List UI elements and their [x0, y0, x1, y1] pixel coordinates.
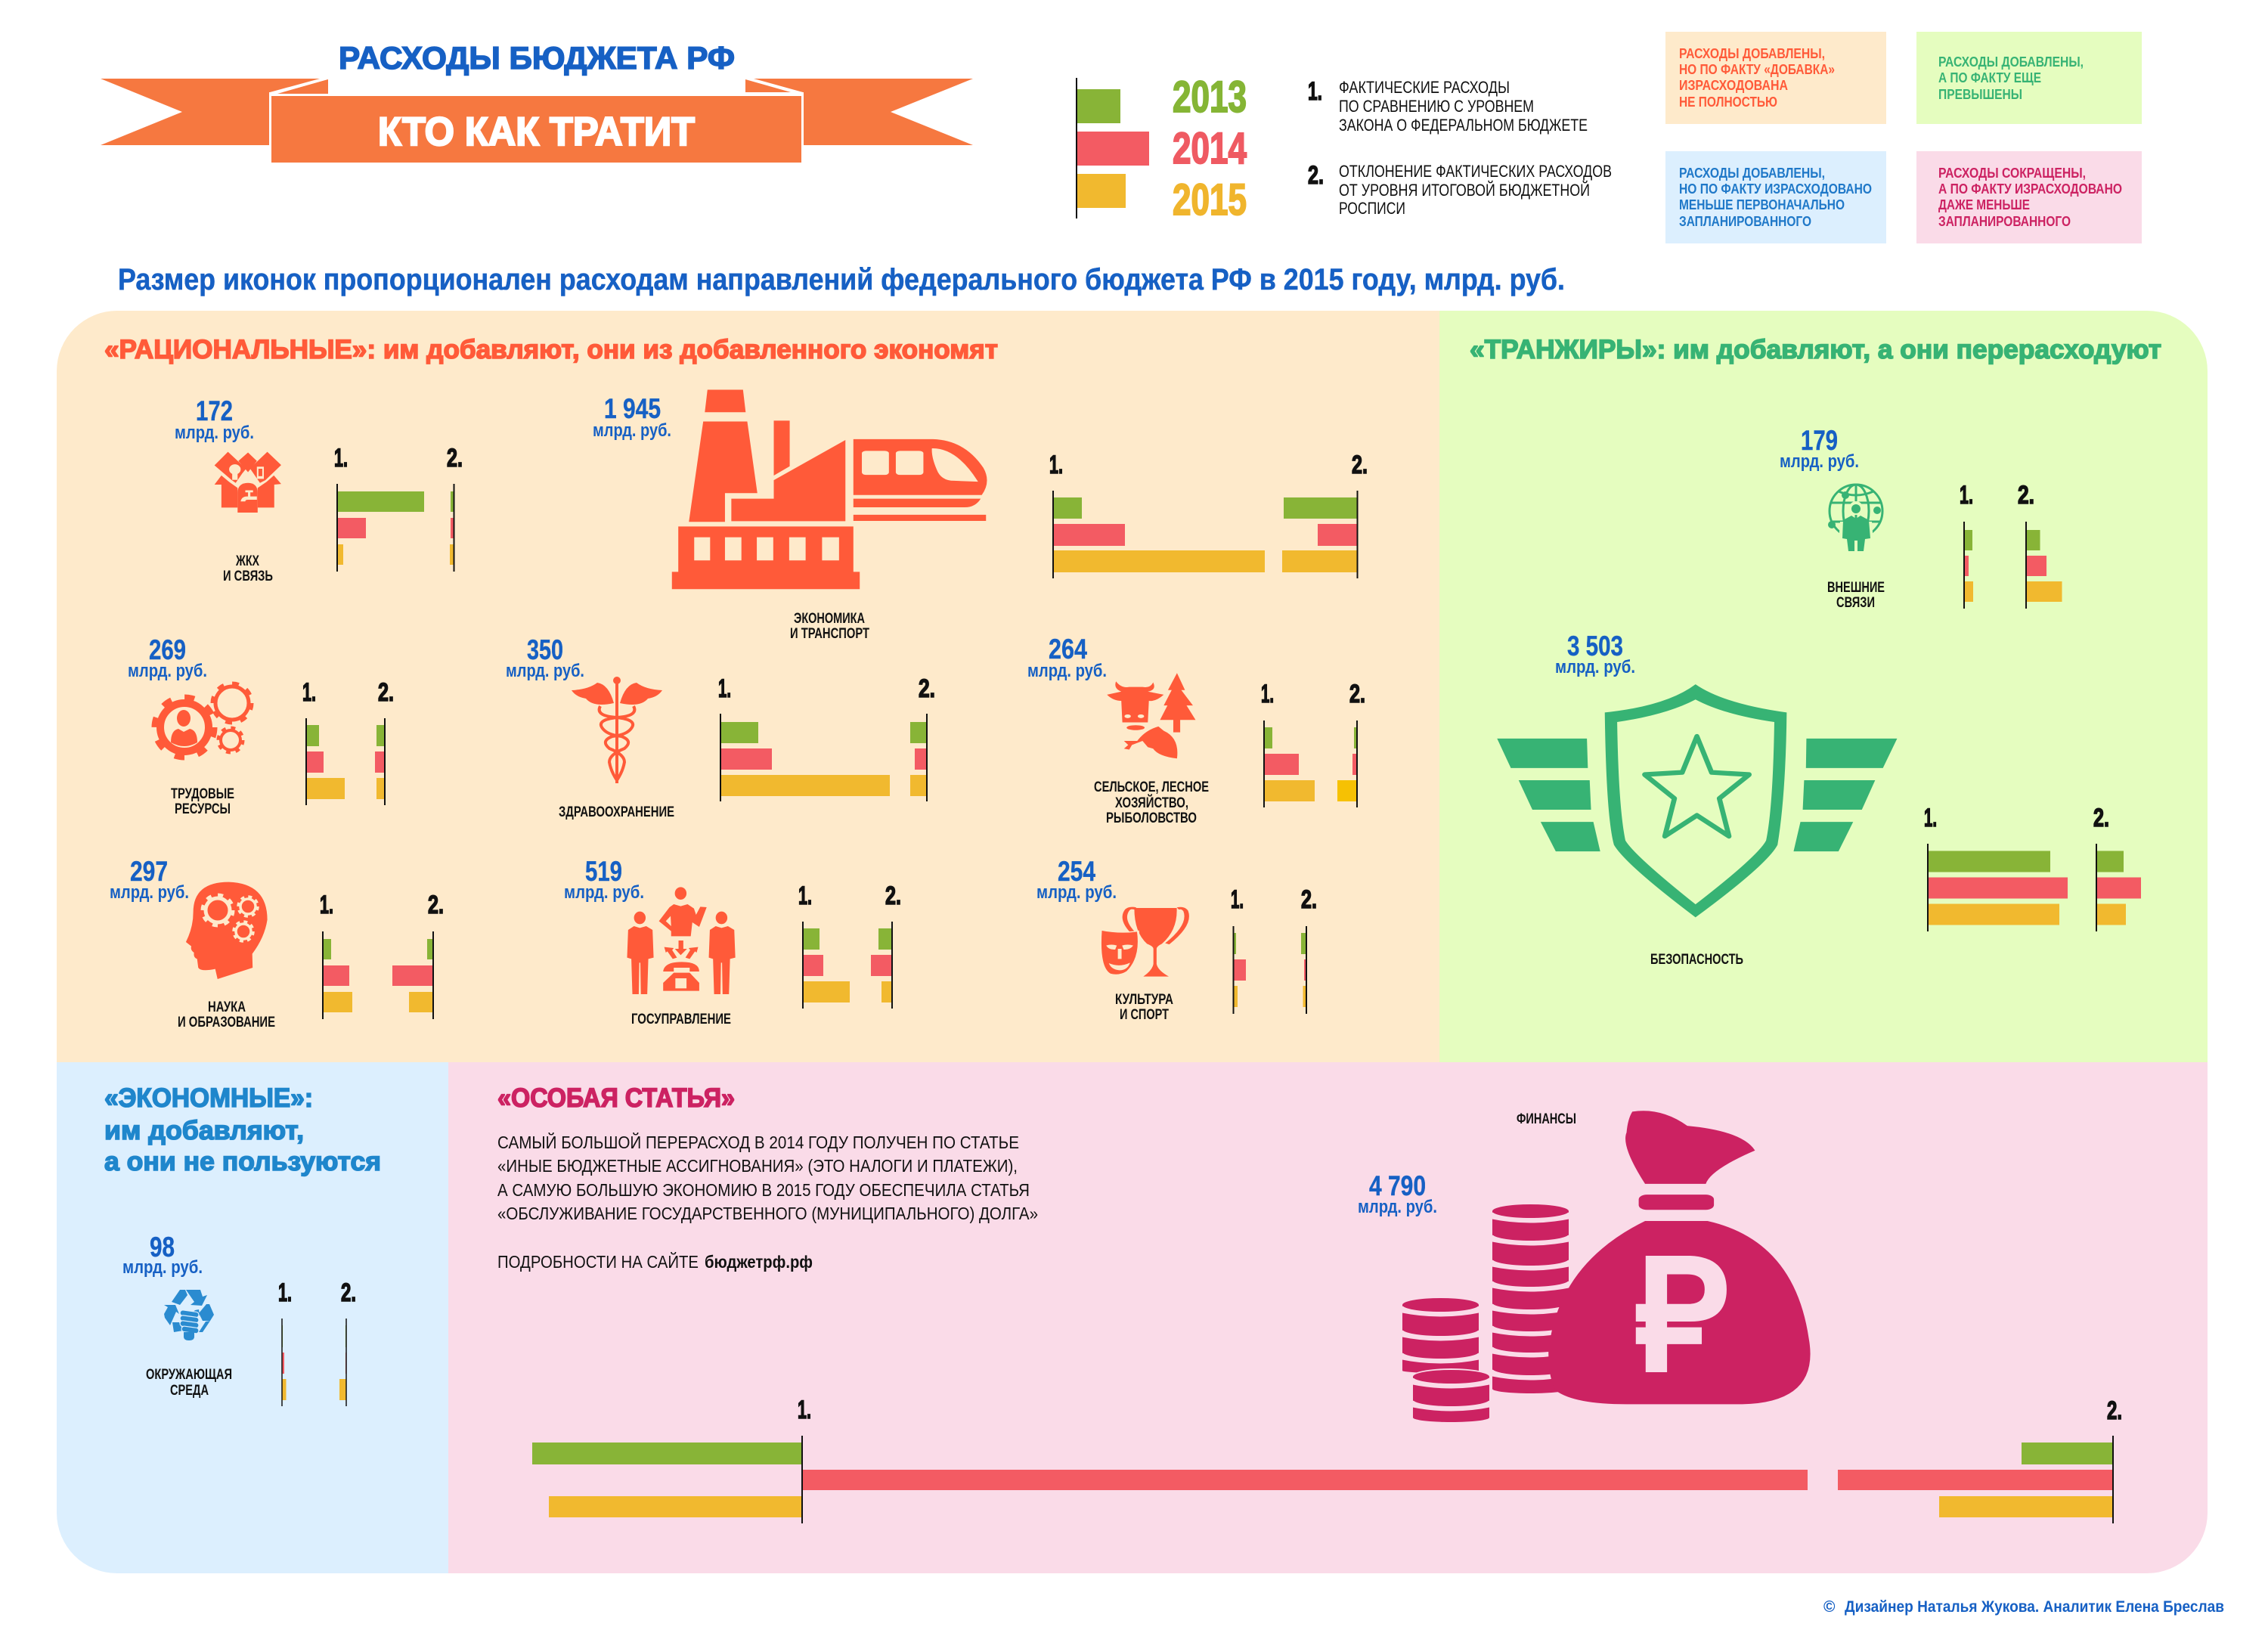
bar chart 1: 1. — [320, 891, 333, 919]
bar chart 1: 1. — [334, 444, 348, 473]
label: И ТРАНСПОРТ — [790, 626, 869, 642]
value: млрд. руб. — [122, 1257, 203, 1278]
item: labour resources — [128, 634, 394, 817]
label — [171, 786, 234, 817]
icon: head with gears — [186, 882, 268, 979]
bar chart 2: 2. — [341, 1278, 356, 1307]
value — [110, 856, 189, 903]
bar chart 2: 2. — [1352, 451, 1368, 479]
bar chart 1 — [1960, 481, 1973, 609]
bar chart 2: 2. — [447, 444, 463, 473]
value — [1027, 634, 1107, 681]
legend: explanation of charts: ОТКЛОНЕНИЕ ФАКТИЧЕСКИХ РАСХОДОВ — [1339, 162, 1612, 181]
bar chart 1 — [302, 678, 345, 805]
bar chart 2: 2. — [885, 882, 901, 910]
label: БЕЗОПАСНОСТЬ — [1650, 952, 1743, 968]
label: И СПОРТ — [1120, 1007, 1169, 1023]
heading: thrifty: им добавляют, — [104, 1116, 304, 1145]
bar chart 2 — [1838, 1396, 2122, 1523]
legend: explanation of charts — [1308, 77, 1612, 218]
label — [1115, 992, 1173, 1023]
legend: years — [1077, 73, 1247, 225]
legend: years: 2013 — [1173, 73, 1247, 122]
bar chart 1: 1. — [278, 1278, 292, 1307]
value: 172 — [196, 395, 233, 426]
label: И ОБРАЗОВАНИЕ — [178, 1015, 275, 1030]
legend box: thrifty: НО ПО ФАКТУ ИЗРАСХОДОВАНО — [1679, 181, 1872, 197]
value: 3 503 — [1567, 631, 1623, 662]
bar chart 2: 2. — [378, 678, 394, 707]
bar chart 2 — [339, 1278, 356, 1406]
legend box: thrifty: МЕНЬШЕ ПЕРВОНАЧАЛЬНО — [1679, 197, 1845, 212]
value: 254 — [1058, 856, 1095, 887]
item: security — [1497, 631, 2141, 968]
label: ХОЗЯЙСТВО, — [1115, 795, 1188, 811]
item: finance — [532, 1111, 2122, 1523]
text block: explanation: А САМУЮ БОЛЬШУЮ ЭКОНОМИЮ В 2015 ГОДУ ОБЕСПЕЧИЛА СТАТЬЯ — [497, 1180, 1030, 1200]
bar chart 2: 2. — [2018, 481, 2034, 510]
text block: explanation: ПОДРОБНОСТИ НА САЙТЕ — [497, 1251, 699, 1272]
legend box: special: ДАЖЕ МЕНЬШЕ — [1938, 197, 2030, 212]
bar chart 2: 2. — [2107, 1396, 2122, 1425]
label — [1094, 779, 1209, 826]
legend box: special — [1916, 151, 2142, 243]
value: 264 — [1049, 634, 1087, 665]
bar chart 1 — [1049, 451, 1265, 578]
bar chart 2 — [871, 882, 901, 1009]
bar chart 2: 2. — [919, 674, 935, 703]
bar chart 1 — [334, 444, 424, 572]
heading: thrifty: а они не пользуются — [104, 1147, 381, 1176]
label — [1827, 580, 1885, 611]
bar chart 1: 1. — [302, 678, 316, 707]
value: 350 — [527, 634, 563, 665]
legend box: spenders: РАСХОДЫ ДОБАВЛЕНЫ, — [1938, 54, 2084, 70]
text block: explanation: бюджетрф.рф — [705, 1252, 813, 1272]
icon: globe with person — [1828, 485, 1882, 552]
label: ТРУДОВЫЕ — [171, 786, 234, 802]
value — [506, 634, 584, 681]
panel: spenders — [1439, 311, 2208, 1062]
icon: cow, tree and fish — [1107, 673, 1195, 758]
bar chart 2 — [2093, 804, 2141, 931]
coin stacks — [1400, 1204, 1571, 1422]
value: 269 — [149, 634, 186, 665]
value: 1 945 — [604, 393, 661, 424]
value: млрд. руб. — [506, 661, 584, 681]
item: culture and sport — [1036, 856, 1317, 1023]
bar chart 2 — [1337, 680, 1365, 807]
label: ЖКХ — [235, 553, 259, 569]
label: РЕСУРСЫ — [175, 801, 231, 817]
heading: thrifty: «ЭКОНОМНЫЕ»: — [104, 1083, 313, 1113]
money bag — [1548, 1111, 1811, 1404]
bar chart 1 — [1231, 885, 1246, 1014]
label: СРЕДА — [170, 1383, 209, 1399]
text block: explanation — [497, 1132, 1038, 1272]
bar chart 2 — [910, 674, 935, 801]
bar chart 2 — [375, 678, 394, 805]
value: млрд. руб. — [1036, 882, 1117, 903]
value: млрд. руб. — [110, 882, 189, 903]
bar chart 1 — [718, 674, 890, 801]
text block: explanation: «ИНЫЕ БЮДЖЕТНЫЕ АССИГНОВАНИЯ» (ЭТО НАЛОГИ И ПЛАТЕЖИ), — [497, 1156, 1018, 1176]
bar chart 1: 1. — [1960, 481, 1973, 510]
legend box: thrifty: РАСХОДЫ ДОБАВЛЕНЫ, — [1679, 166, 1825, 181]
label — [223, 553, 273, 584]
bar chart 1: 1. — [798, 1396, 811, 1424]
value: млрд. руб. — [175, 423, 254, 443]
value: 519 — [585, 856, 622, 887]
label: ЗДРАВООХРАНЕНИЕ — [559, 804, 674, 820]
legend: explanation of charts: ФАКТИЧЕСКИЕ РАСХОДЫ — [1339, 78, 1510, 97]
value: млрд. руб. — [1027, 661, 1107, 681]
bar chart 2: 2. — [428, 891, 444, 919]
panel: thrifty — [57, 1062, 448, 1573]
bar chart 2 — [2018, 481, 2062, 609]
ribbon banner — [101, 79, 973, 163]
bar chart 2: 2. — [1349, 680, 1365, 708]
heading: spenders: «ТРАНЖИРЫ»: им добавляют, а они перерасходуют — [1470, 335, 2161, 364]
footer credit: Дизайнер Наталья Жукова. Аналитик Елена Бреслав — [1845, 1598, 2224, 1616]
legend: explanation of charts: 2. — [1308, 161, 1324, 190]
legend: years: 2015 — [1173, 175, 1247, 225]
value — [564, 856, 644, 903]
item: foreign relations — [1780, 425, 2062, 611]
heading: thrifty — [104, 1083, 381, 1176]
legend: explanation of charts: ОТ УРОВНЯ ИТОГОВОЙ БЮДЖЕТНОЙ — [1339, 181, 1590, 200]
legend box: rational: РАСХОДЫ ДОБАВЛЕНЫ, — [1679, 46, 1825, 61]
label: КУЛЬТУРА — [1115, 992, 1173, 1008]
bar chart 1: 1. — [1261, 680, 1274, 708]
bar chart 1: 1. — [1924, 804, 1937, 832]
bar chart 1: 1. — [1049, 451, 1063, 479]
legend box: thrifty — [1665, 151, 1886, 243]
value: млрд. руб. — [1358, 1197, 1437, 1217]
label: ГОСУПРАВЛЕНИЕ — [631, 1012, 731, 1027]
label — [790, 611, 869, 642]
icon: recycling handshake — [164, 1290, 214, 1340]
legend box: rational: НЕ ПОЛНОСТЬЮ — [1679, 95, 1777, 110]
label: ОКРУЖАЮЩАЯ — [146, 1367, 232, 1383]
label — [146, 1367, 232, 1399]
item: public administration — [564, 856, 901, 1027]
value: млрд. руб. — [1780, 451, 1859, 472]
value: млрд. руб. — [564, 882, 644, 903]
value: 4 790 — [1369, 1170, 1426, 1201]
value — [593, 393, 671, 441]
legend box: special: А ПО ФАКТУ ИЗРАСХОДОВАНО — [1938, 181, 2122, 197]
panel: rational — [57, 311, 1439, 1062]
label: И СВЯЗЬ — [223, 569, 273, 584]
label: СЕЛЬСКОЕ, ЛЕСНОЕ — [1094, 779, 1209, 795]
title: РАСХОДЫ БЮДЖЕТА РФ — [339, 40, 735, 76]
value — [1780, 425, 1859, 472]
icon: shield with wings and star — [1497, 684, 1897, 917]
label: ЭКОНОМИКА — [794, 611, 865, 627]
icon: gears with person — [155, 683, 252, 757]
value — [175, 395, 254, 443]
value: млрд. руб. — [593, 420, 671, 441]
bar chart 1 — [1261, 680, 1315, 807]
legend: years: 2014 — [1173, 124, 1247, 173]
icon: mask and trophy — [1101, 908, 1187, 977]
legend: explanation of charts: ПО СРАВНЕНИЮ С УРОВНЕМ — [1339, 97, 1534, 116]
heading: special item: «ОСОБАЯ СТАТЬЯ» — [497, 1083, 735, 1113]
item: science and education — [110, 856, 444, 1030]
value — [122, 1232, 203, 1278]
bar chart 1 — [532, 1396, 1808, 1523]
legend box: rational — [1665, 32, 1886, 124]
item: environment — [122, 1232, 356, 1406]
bar chart 2 — [447, 444, 463, 572]
legend box: rational: НО ПО ФАКТУ «ДОБАВКА» — [1679, 62, 1835, 77]
bar chart 2 — [1282, 451, 1368, 578]
legend box: spenders: А ПО ФАКТУ ЕЩЕ — [1938, 70, 2041, 85]
bar chart 2 — [392, 891, 444, 1019]
value: 98 — [150, 1232, 175, 1263]
value — [1555, 631, 1635, 677]
label: СВЯЗИ — [1836, 595, 1875, 611]
icon: officials and telephone — [627, 887, 736, 994]
legend: explanation of charts: РОСПИСИ — [1339, 199, 1405, 218]
icon: houses — [215, 452, 281, 513]
value — [128, 634, 207, 681]
bar chart 1: 1. — [798, 882, 812, 910]
heading: rational: «РАЦИОНАЛЬНЫЕ»: им добавляют, они из добавленного экономят — [104, 335, 998, 364]
legend: explanation of charts: ЗАКОНА О ФЕДЕРАЛЬНОМ БЮДЖЕТЕ — [1339, 116, 1588, 135]
bar chart 1 — [278, 1278, 292, 1406]
label: РЫБОЛОВСТВО — [1106, 810, 1197, 826]
legend box: special: ЗАПЛАНИРОВАННОГО — [1938, 214, 2071, 229]
panel: special item — [448, 1062, 2208, 1573]
bar chart 2: 2. — [1301, 885, 1317, 914]
label: ВНЕШНИЕ — [1827, 580, 1885, 596]
legend box: special: РАСХОДЫ СОКРАЩЕНЫ, — [1938, 166, 2086, 181]
subtitle: Размер иконок пропорционален расходам направлений федерального бюджета РФ в 2015 году, млрд. руб. — [118, 263, 1565, 296]
icon: factory and train — [672, 390, 987, 589]
bar chart 1 — [320, 891, 352, 1019]
icon: money bag and coins — [1400, 1111, 1811, 1422]
bar chart 1 — [1924, 804, 2068, 931]
bar chart 1 — [798, 882, 850, 1009]
legend box: spenders: ПРЕВЫШЕНЫ — [1938, 87, 2022, 102]
value — [1036, 856, 1117, 903]
legend box: thrifty: ЗАПЛАНИРОВАННОГО — [1679, 214, 1811, 229]
text block: explanation: «ОБСЛУЖИВАНИЕ ГОСУДАРСТВЕННОГО (МУНИЦИПАЛЬНОГО) ДОЛГА» — [497, 1204, 1038, 1223]
bar chart 2 — [1301, 885, 1317, 1014]
item: economy and transport — [593, 390, 1368, 642]
legend: explanation of charts: 1. — [1308, 77, 1322, 106]
value: млрд. руб. — [128, 661, 207, 681]
value: млрд. руб. — [1555, 657, 1635, 677]
bar chart 2: 2. — [2093, 804, 2109, 832]
value: 179 — [1801, 425, 1838, 456]
item: housing and communications — [175, 395, 463, 584]
item: agriculture — [1027, 634, 1365, 826]
item: healthcare — [506, 634, 935, 820]
value — [1358, 1170, 1437, 1217]
legend box: rational: ИЗРАСХОДОВАНА — [1679, 78, 1788, 93]
ribbon banner: КТО КАК ТРАТИТ — [378, 110, 695, 154]
icon: caduceus — [572, 677, 662, 783]
bar chart 1: 1. — [718, 674, 731, 703]
label: НАУКА — [208, 999, 246, 1015]
label: ФИНАНСЫ — [1517, 1111, 1576, 1127]
legend box: spenders — [1916, 32, 2142, 124]
footer credit: © — [1823, 1598, 1836, 1616]
bar chart 1: 1. — [1231, 885, 1244, 914]
text block: explanation: САМЫЙ БОЛЬШОЙ ПЕРЕРАСХОД В 2014 ГОДУ ПОЛУЧЕН ПО СТАТЬЕ — [497, 1132, 1019, 1152]
label — [178, 999, 275, 1030]
value: 297 — [130, 856, 168, 887]
